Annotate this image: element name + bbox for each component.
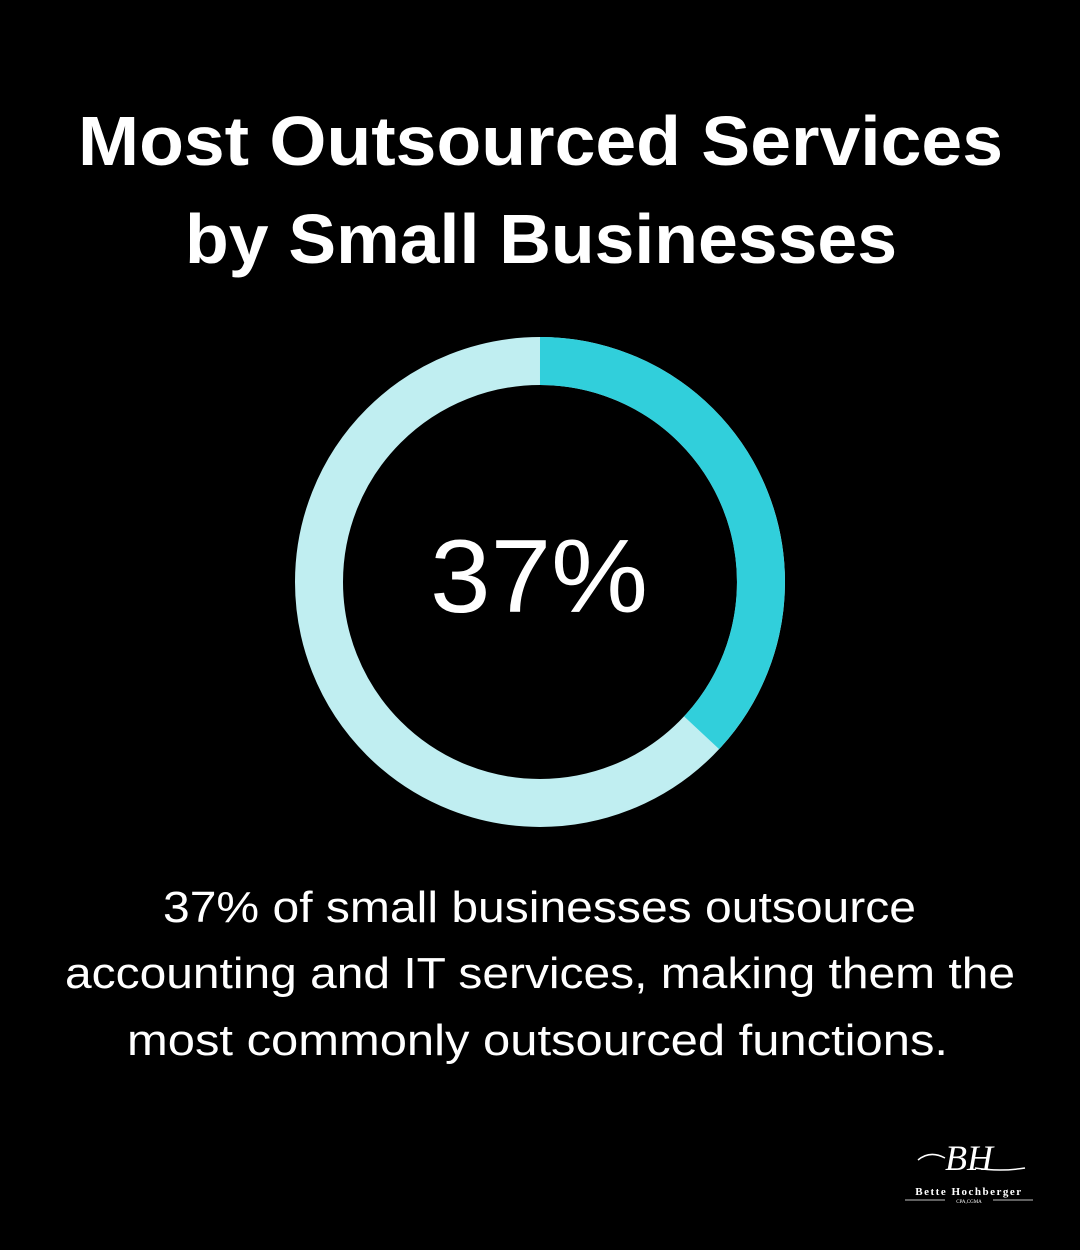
description text: accounting and IT services, making them the (65, 949, 1015, 998)
center value: 37% (430, 519, 648, 635)
logo (905, 1138, 1033, 1205)
title (78, 102, 1003, 278)
description text: most commonly outsourced functions. (127, 1016, 948, 1065)
title: Most Outsourced Services (78, 102, 1003, 180)
description text (65, 883, 1015, 1065)
title: by Small Businesses (185, 200, 897, 278)
donut chart (319, 361, 761, 803)
logo: BH (945, 1138, 995, 1178)
description text: 37% of small businesses outsource (163, 883, 916, 932)
logo: CPA,CGMA (956, 1200, 982, 1205)
logo: Bette Hochberger (915, 1186, 1023, 1198)
